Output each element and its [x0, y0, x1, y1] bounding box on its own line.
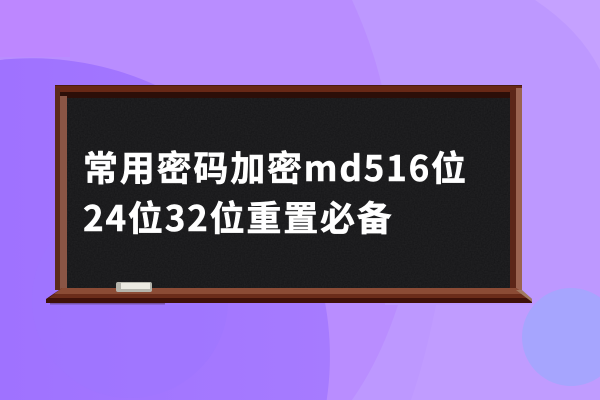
chalk: [116, 282, 152, 292]
title line 2: 24位32位重置必备: [83, 191, 394, 242]
frame: [55, 85, 522, 290]
blackboard surface: [67, 98, 510, 288]
title line 1: 常用密码加密md516位: [83, 141, 468, 192]
chalk ledge: [46, 288, 532, 304]
chalkboard: [46, 85, 532, 304]
